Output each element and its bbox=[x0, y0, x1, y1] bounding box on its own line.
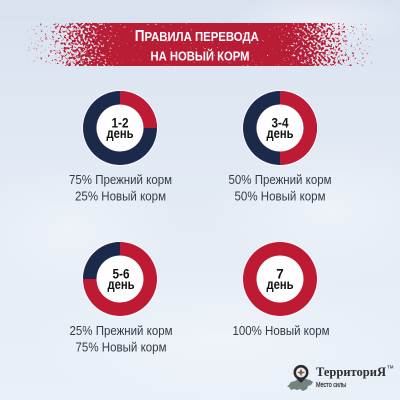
panel: day 3-4 bbox=[228, 90, 332, 204]
caption: 25% Новый корм bbox=[75, 188, 166, 204]
panel: day 1-2 bbox=[69, 90, 172, 204]
caption: 50% Прежний корм bbox=[228, 172, 332, 187]
panel: day 7 bbox=[232, 241, 330, 338]
day label: день bbox=[106, 126, 134, 141]
day label: 3-4 bbox=[272, 116, 289, 130]
day label: 7 bbox=[276, 266, 284, 282]
title banner bbox=[27, 23, 373, 66]
banner speckled brush shape bbox=[27, 23, 373, 66]
trademark: ТМ bbox=[387, 364, 394, 370]
caption: 75% Прежний корм bbox=[69, 172, 172, 187]
tagline: Место силы bbox=[316, 382, 346, 389]
donut chart 50/50 bbox=[242, 90, 318, 166]
icon: compass pin bbox=[294, 365, 309, 383]
title text: НА НОВЫЙ КОРМ bbox=[150, 48, 250, 64]
day label: день bbox=[108, 277, 134, 292]
icon: map bbox=[287, 379, 313, 391]
caption: 100% Новый корм bbox=[232, 323, 330, 338]
donut chart 75/25 bbox=[82, 90, 158, 166]
donut chart 100 bbox=[242, 241, 318, 317]
day label: день bbox=[266, 277, 294, 292]
logo bbox=[287, 364, 394, 391]
day label: 1-2 bbox=[112, 116, 128, 130]
day label: день bbox=[266, 126, 294, 141]
caption: 25% Прежний корм bbox=[70, 323, 173, 338]
caption: 75% Новый корм bbox=[76, 340, 167, 354]
caption: 50% Новый корм bbox=[234, 188, 326, 204]
donut chart 25/75 bbox=[82, 241, 158, 317]
title text: ПРАВИЛА ПЕРЕВОДА bbox=[135, 28, 275, 45]
panel: day 5-6 bbox=[70, 241, 173, 354]
day label: 5-6 bbox=[112, 266, 130, 282]
brand name: ТерриториЯ bbox=[316, 365, 386, 379]
